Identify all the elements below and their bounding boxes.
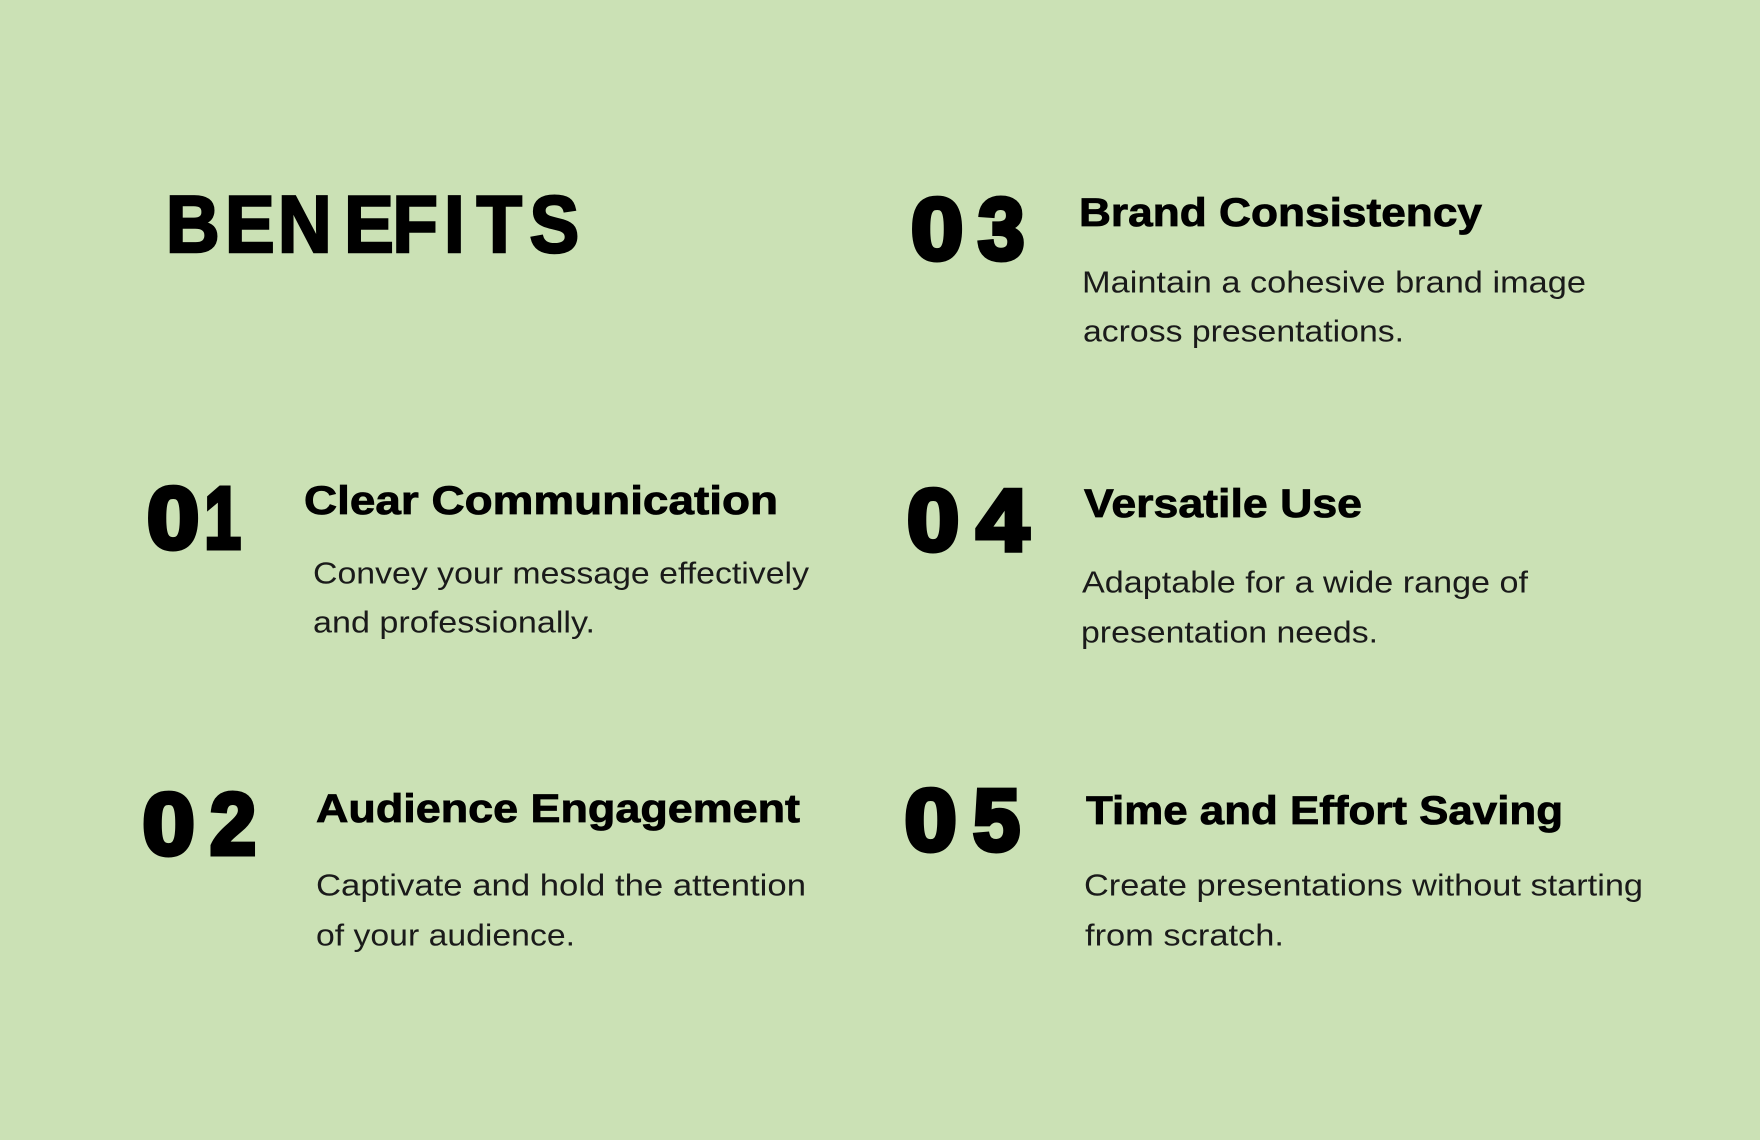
description: benefit 02: of your audience. bbox=[316, 918, 575, 952]
number 04: 4 bbox=[976, 472, 1029, 569]
number 01: 0 bbox=[147, 470, 199, 567]
description: benefit 04: presentation needs. bbox=[1081, 616, 1378, 650]
number 05 bbox=[904, 772, 1020, 869]
panel: benefit 01 bbox=[147, 470, 810, 640]
number 04 bbox=[907, 472, 1029, 569]
description: benefit 02 bbox=[316, 868, 806, 952]
number 03 bbox=[911, 181, 1024, 278]
number 05: 5 bbox=[973, 772, 1020, 869]
description: benefit 03 bbox=[1082, 266, 1586, 348]
heading: Versatile Use: Versatile Use bbox=[1084, 482, 1362, 526]
heading: Time and Effort Saving: Time and Effort Saving bbox=[1086, 789, 1563, 833]
description: benefit 01: and professionally. bbox=[313, 606, 595, 640]
title: BENEFITS bbox=[166, 180, 579, 270]
number 02 bbox=[142, 775, 256, 873]
description: benefit 03: Maintain a cohesive brand image bbox=[1082, 266, 1586, 300]
number 03: 0 bbox=[911, 181, 963, 278]
number 01: 1 bbox=[204, 470, 241, 567]
heading: Clear Communication: Clear Communication bbox=[304, 479, 778, 523]
panel: benefit 03 bbox=[911, 181, 1586, 348]
description: benefit 05: from scratch. bbox=[1085, 918, 1284, 952]
number 02: 0 bbox=[142, 776, 195, 873]
description: benefit 05 bbox=[1084, 868, 1643, 952]
panel: benefit 05 bbox=[904, 772, 1643, 952]
description: benefit 01 bbox=[313, 556, 810, 640]
description: benefit 02: Captivate and hold the attention bbox=[316, 868, 806, 902]
description: benefit 04 bbox=[1081, 566, 1529, 650]
description: benefit 03: across presentations. bbox=[1083, 314, 1404, 348]
number 05: 0 bbox=[904, 772, 957, 869]
panel: benefit 04 bbox=[907, 472, 1529, 650]
heading: Brand Consistency: Brand Consistency bbox=[1079, 191, 1483, 235]
number 02: 2 bbox=[210, 775, 256, 872]
panel: benefit 02 bbox=[142, 775, 806, 952]
description: benefit 01: Convey your message effectively bbox=[313, 556, 810, 590]
number 04: 0 bbox=[907, 472, 959, 569]
number 03: 3 bbox=[978, 181, 1024, 278]
heading: Audience Engagement: Audience Engagement bbox=[316, 787, 800, 831]
description: benefit 04: Adaptable for a wide range of bbox=[1082, 566, 1529, 600]
number 01 bbox=[147, 470, 241, 567]
description: benefit 05: Create presentations without starting bbox=[1084, 868, 1643, 902]
